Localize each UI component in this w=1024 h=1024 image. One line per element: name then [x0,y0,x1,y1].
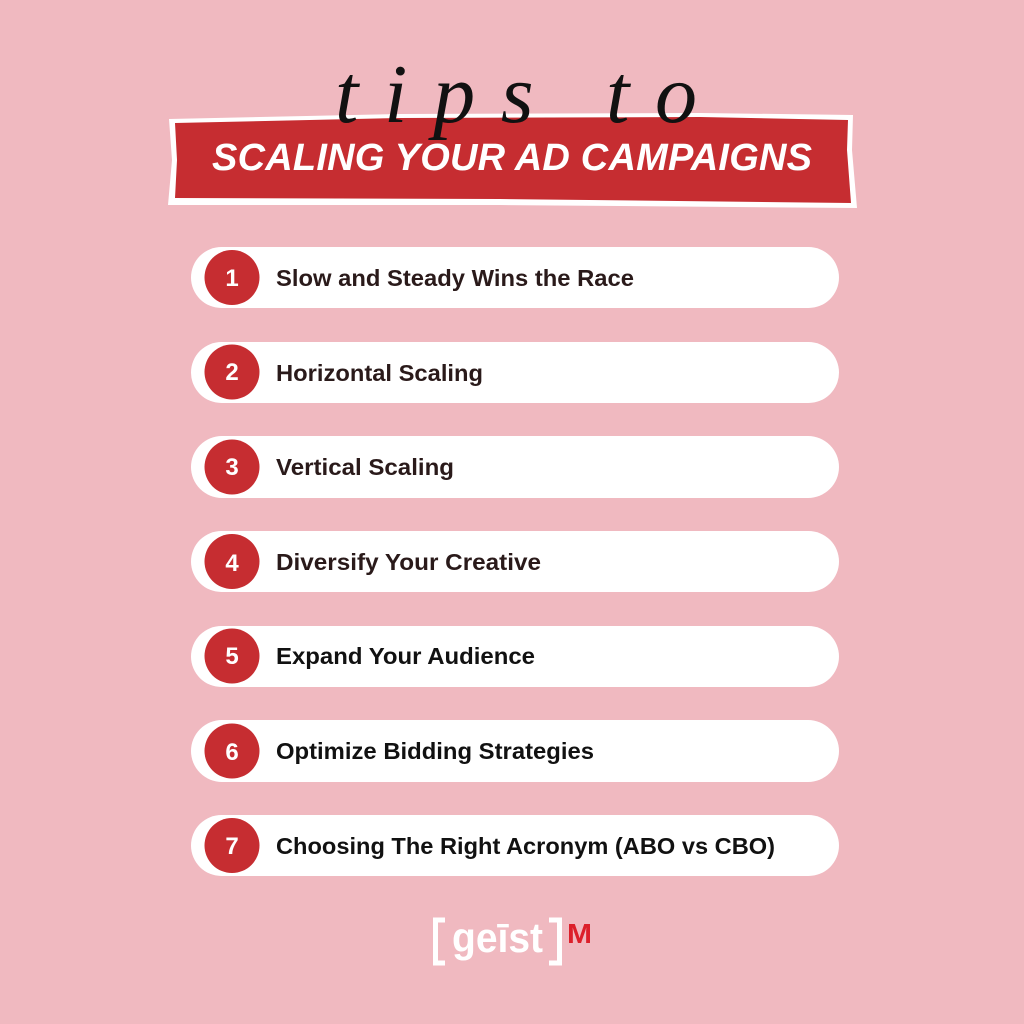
tip 7: Choosing The Right Acronym (ABO vs CBO) [276,833,775,859]
tip 3: 3 [225,454,239,481]
tip 5: Expand Your Audience [276,643,535,669]
tip 5: 5 [225,643,239,670]
logo: geīst [452,914,543,961]
tip 7: 7 [225,833,239,860]
tip 4 [191,531,839,592]
logo [436,914,592,963]
tip 2 [191,342,839,403]
tip 6: 6 [225,739,239,766]
tip 2: Horizontal Scaling [276,360,483,386]
banner title text: SCALING YOUR AD CAMPAIGNS [212,137,812,179]
tip 3: Vertical Scaling [276,454,454,480]
tip 5 [191,626,839,687]
tip 4: 4 [225,550,239,577]
tip 4: Diversify Your Creative [276,549,541,575]
title banner [168,113,857,208]
tip 6: Optimize Bidding Strategies [276,738,594,764]
tip 7 [191,815,839,876]
tip 1: Slow and Steady Wins the Race [276,265,634,291]
tip 3 [191,436,839,498]
tip 1: 1 [225,265,239,292]
tip 6 [191,720,839,782]
tip 2: 2 [225,359,239,386]
tip 1 [191,247,839,308]
script heading: tips to [335,48,697,141]
logo: M [567,918,592,949]
